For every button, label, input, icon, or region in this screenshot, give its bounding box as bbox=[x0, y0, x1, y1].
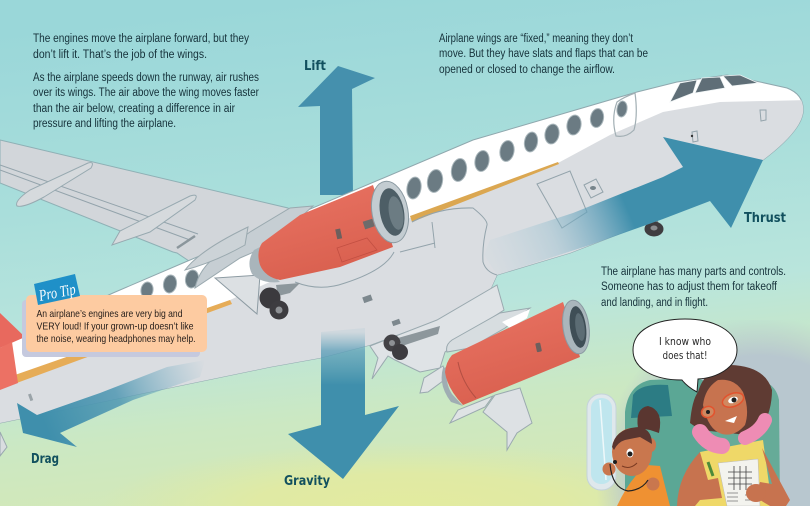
text block: engines and wings: pressure and lifting the airplane. bbox=[33, 118, 176, 130]
lower landing gear bbox=[384, 326, 440, 360]
seats bbox=[625, 378, 780, 506]
eyes bbox=[626, 448, 634, 458]
hair bun bbox=[637, 406, 660, 433]
text block: parts and controls bbox=[601, 266, 786, 309]
callout text bbox=[36, 309, 196, 345]
cabin door bbox=[614, 93, 636, 136]
crossword page bbox=[718, 459, 760, 506]
upper landing gear bbox=[260, 283, 300, 320]
airplane fuselage bbox=[0, 75, 810, 440]
belly fairing bbox=[412, 208, 497, 275]
passenger windows bbox=[140, 100, 628, 299]
near wing and flaps bbox=[370, 285, 532, 450]
speech bubble: does that! bbox=[662, 350, 708, 362]
pro tip badge: Pro Tip bbox=[37, 281, 77, 305]
speech bubble bbox=[633, 319, 737, 392]
text block: parts and controls: The airplane has many parts and controls. bbox=[601, 266, 786, 278]
callout text: An airplane’s engines are very big and bbox=[36, 309, 183, 320]
hand holding page bbox=[746, 484, 766, 502]
seat: girl bbox=[625, 378, 712, 506]
callout box bbox=[26, 295, 207, 352]
upper engine bbox=[249, 178, 413, 287]
seat headrest bbox=[631, 385, 672, 418]
cockpit windows bbox=[670, 75, 758, 102]
neck pillow bbox=[700, 420, 765, 446]
callout text: VERY loud! If your grown-up doesn’t like bbox=[36, 322, 194, 332]
woman with neck pillow and crossword bbox=[677, 365, 790, 506]
text block: engines and wings: over its wings. The air above the wing moves faster bbox=[33, 87, 259, 99]
face bbox=[703, 380, 747, 435]
engine intake bbox=[367, 178, 413, 246]
speech bubble: I know who bbox=[659, 336, 711, 348]
label: gravity: Gravity bbox=[284, 474, 330, 489]
arrow: thrust bbox=[484, 137, 763, 275]
panels bbox=[400, 110, 766, 252]
text block: parts and controls: Someone has to adjust them for takeoff bbox=[601, 281, 778, 293]
hands and headphone wire bbox=[602, 462, 616, 476]
text block: fixed wings bbox=[439, 33, 648, 76]
callout shadow bbox=[22, 300, 200, 357]
label: drag: Drag bbox=[31, 452, 59, 467]
text block: fixed wings: opened or closed to change the airflow. bbox=[439, 64, 615, 76]
hair bbox=[690, 365, 772, 436]
pro tip callout bbox=[22, 274, 207, 357]
left arm bbox=[677, 452, 722, 506]
arrow: lift bbox=[298, 66, 375, 195]
text block: engines and wings: than the air below, creating a difference in air bbox=[33, 103, 235, 115]
pro tip badge bbox=[34, 274, 80, 305]
right arm bbox=[755, 448, 790, 506]
orange stripe bbox=[12, 162, 559, 384]
airplane cabin window bbox=[587, 394, 616, 490]
drag vent bbox=[28, 393, 33, 401]
text block: parts and controls: and landing, and in flight. bbox=[601, 297, 708, 309]
label: lift: Lift bbox=[304, 59, 326, 74]
glasses bbox=[700, 390, 746, 419]
label: thrust: Thrust bbox=[744, 211, 786, 226]
hair bbox=[612, 427, 652, 450]
engine intake bbox=[559, 298, 593, 356]
text block: engines and wings: don’t lift it. That’s the job of the wings. bbox=[33, 49, 207, 61]
text block: engines and wings bbox=[33, 33, 259, 130]
text block: fixed wings: move. But they have slats and flaps that can be bbox=[439, 48, 648, 60]
head bbox=[612, 428, 652, 476]
arrow: drag bbox=[17, 360, 205, 447]
arrow: gravity bbox=[288, 328, 399, 479]
girl with headphones bbox=[602, 406, 670, 506]
shirt bbox=[690, 440, 772, 506]
far wing bbox=[0, 140, 300, 280]
callout text: the noise, wearing headphones may help. bbox=[36, 334, 196, 345]
smile bbox=[725, 416, 737, 423]
shirt bbox=[617, 465, 670, 506]
wing fairing bbox=[112, 195, 196, 245]
small belly hatches bbox=[362, 294, 401, 326]
text block: fixed wings: Airplane wings are “fixed,” meaning they don’t bbox=[439, 33, 634, 45]
nose landing gear bbox=[644, 209, 664, 236]
seat: woman bbox=[708, 378, 780, 506]
lower engine bbox=[442, 298, 593, 406]
wing fairing bbox=[17, 163, 92, 206]
text block: engines and wings: As the airplane speeds down the runway, air rushes bbox=[33, 72, 259, 84]
tail fin bbox=[0, 313, 25, 456]
upper engine pylon bbox=[185, 206, 313, 314]
pen bbox=[708, 462, 713, 476]
text block: engines and wings: The engines move the airplane forward, but they bbox=[33, 33, 249, 45]
